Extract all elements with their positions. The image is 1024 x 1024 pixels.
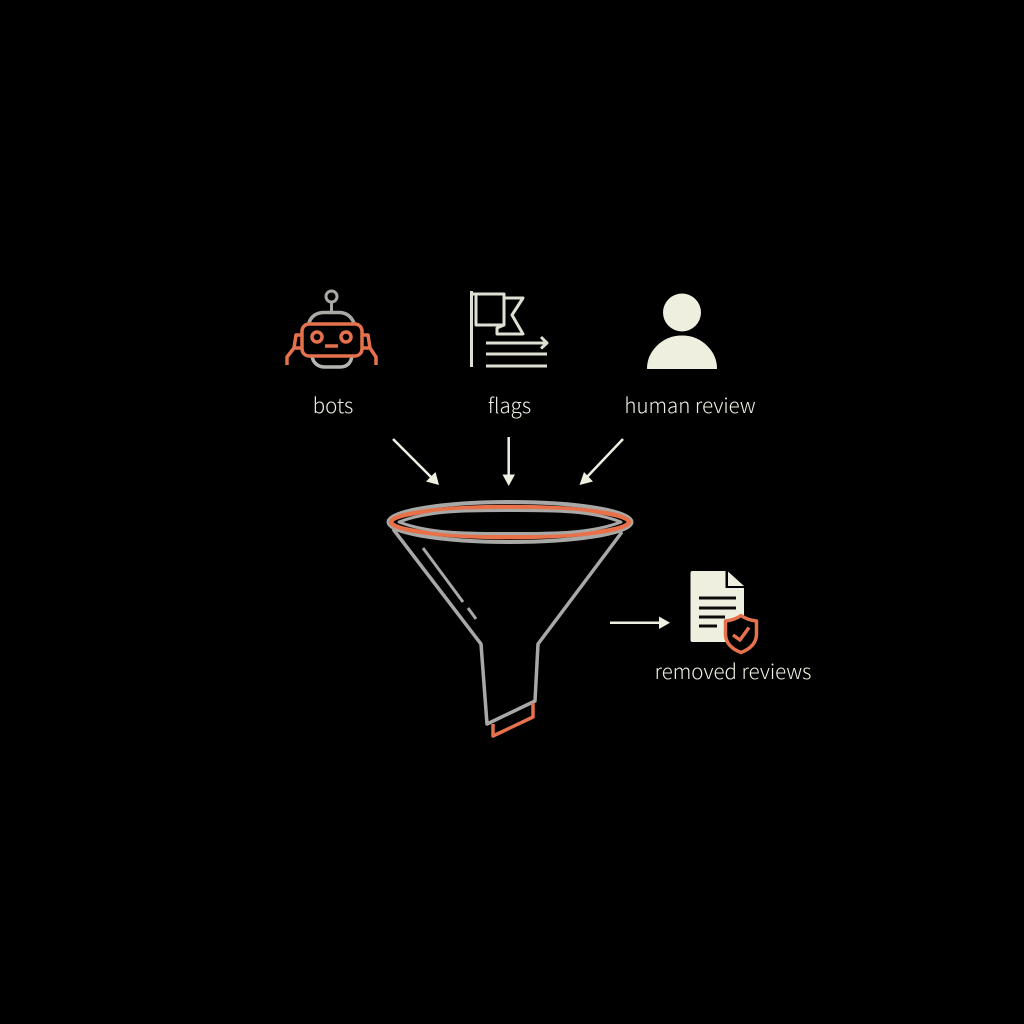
icon: document with shield xyxy=(690,571,756,652)
icon: robot xyxy=(287,291,376,367)
shield xyxy=(726,616,756,652)
document xyxy=(690,571,744,642)
arrow: flags to funnel xyxy=(502,437,515,486)
funnel highlight xyxy=(423,548,476,619)
label: flags: flags xyxy=(488,389,531,419)
icon: person xyxy=(648,294,716,368)
funnel xyxy=(388,502,632,736)
funnel body xyxy=(393,529,622,724)
funnel rim xyxy=(388,502,632,542)
label: human review: human review xyxy=(624,389,756,419)
arrow: funnel to removed reviews xyxy=(610,616,670,629)
arrow: human review to funnel xyxy=(580,439,623,485)
arrow: bots to funnel xyxy=(393,439,439,485)
funnel spout tip xyxy=(493,703,533,736)
icon: flag xyxy=(472,291,547,367)
label: removed reviews: removed reviews xyxy=(655,655,811,685)
label: bots: bots xyxy=(313,389,353,419)
